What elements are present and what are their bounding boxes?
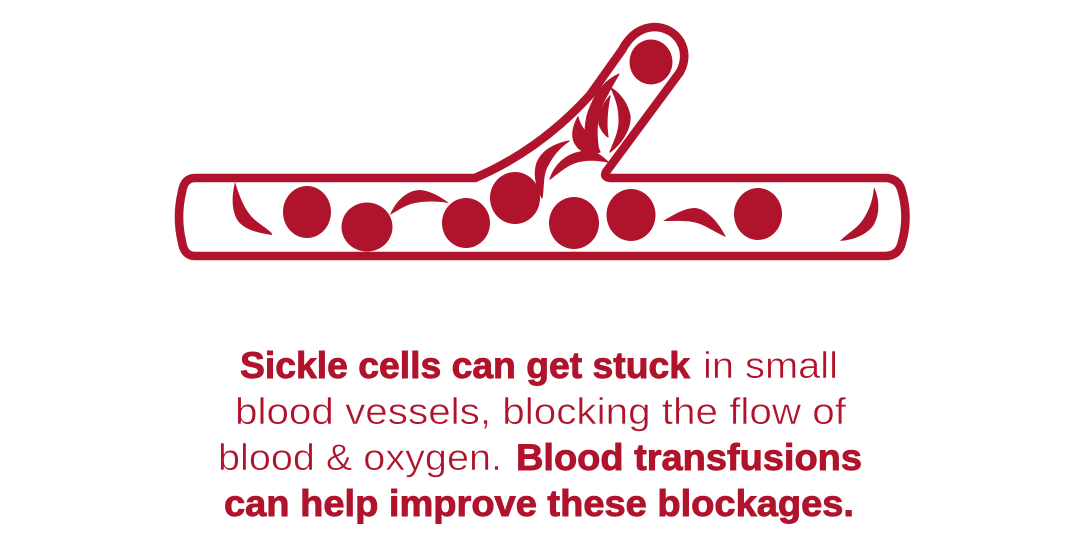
sickle cells in main vessel [233,182,878,241]
line 4: can help improve these blockages. [224,483,854,524]
line 3: Blood transfusions [516,437,862,478]
cluster of stuck sickle cells [535,74,630,198]
line 2: blood vessels, blocking the flow of [235,391,847,432]
line 1: in small [703,345,838,386]
line 3: blood & oxygen. [218,437,502,478]
line 3 [218,437,862,478]
round red blood cells [283,40,782,252]
line 1: Sickle cells can get stuck [240,345,690,386]
diagram: blood vessel with cells [179,27,906,256]
caption text [218,345,862,524]
vessel outline [179,27,906,256]
